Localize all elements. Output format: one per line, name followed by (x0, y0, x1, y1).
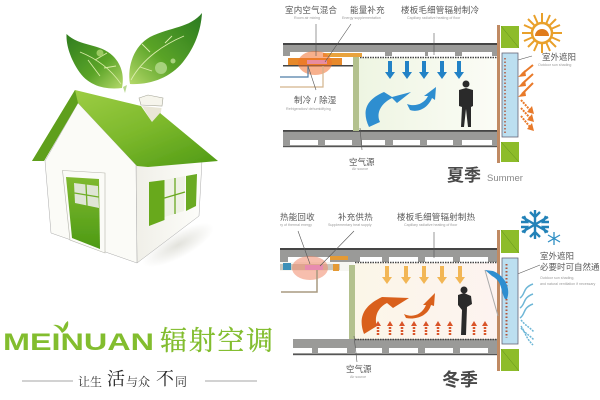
winter room (355, 263, 497, 339)
winter labels: 室外遮阳 (540, 251, 574, 261)
stem (123, 85, 127, 93)
panel: winter diagram (280, 210, 600, 390)
winter labels: Capillary radiative heating of floor (404, 223, 458, 227)
winter floor slab (293, 339, 497, 355)
winter ceiling slab (280, 248, 497, 262)
logo: Chinese name: 辐射空调 (160, 326, 275, 356)
winter labels: 热能回收 (280, 212, 315, 222)
winter labels: 楼板毛细管辐射制热 (397, 212, 476, 222)
icon: person silhouette (459, 80, 473, 127)
icon: sun (522, 13, 562, 53)
summer labels: 室内空气混合 (285, 5, 338, 15)
summer labels: Capillary radiative heating of floor (407, 16, 461, 20)
summer labels (285, 5, 576, 185)
icon: blue airflow arrows (366, 87, 436, 127)
summer left wall and plant (280, 51, 362, 131)
winter labels: 冬季 (442, 370, 478, 390)
slogan: 与众 (126, 375, 150, 389)
icon: right leaf (129, 13, 202, 84)
icon: cool air waves (520, 284, 534, 345)
summer labels: 夏季 (447, 166, 481, 185)
illustration: green house with leaves (32, 13, 219, 275)
slogan: 让生 (78, 374, 102, 389)
summer labels: Energy supplementation (342, 16, 381, 20)
winter labels: Outdoor sun shading, (540, 276, 574, 280)
summer floor slab (283, 130, 497, 147)
icon: large snowflake (521, 210, 549, 239)
summer labels: 楼板毛细管辐射制冷 (401, 5, 480, 15)
winter leader lines (298, 231, 540, 362)
summer labels: 制冷 / 除湿 (294, 95, 337, 105)
winter left wall and plant (280, 256, 355, 339)
icon: orange airflow arrows (362, 293, 435, 334)
icon: small snowflake (548, 232, 560, 245)
summer facade (497, 25, 519, 163)
icon: rising heat arrows (375, 321, 488, 335)
winter labels: and natural ventilation if necessary (540, 282, 596, 286)
icon: person silhouette (458, 286, 472, 335)
door (62, 170, 105, 253)
house side wall (136, 160, 202, 263)
slogan: 不 (156, 369, 174, 389)
icon: logo sprout (53, 321, 68, 333)
winter labels (280, 212, 600, 390)
summer labels: 空气源 (349, 157, 375, 167)
summer labels: Refrigeration/ dehumidifying (286, 107, 331, 111)
winter labels: Air source (350, 375, 366, 379)
summer labels: Air source (352, 167, 368, 171)
winter labels: 空气源 (346, 364, 372, 374)
winter labels: 必要时可自然通 (540, 262, 600, 272)
icon: incoming sun arrows (518, 65, 534, 131)
winter labels: 补充供热 (338, 212, 373, 222)
summer labels: Room air mixing (294, 16, 320, 20)
house front wall (45, 103, 137, 263)
summer ceiling slab (283, 43, 497, 58)
logo: Meinuan wordmark (3, 321, 154, 356)
winter labels: Supplementary heat supply (328, 223, 372, 227)
summer room (358, 58, 497, 131)
summer labels: Outdoor sun shading (538, 63, 571, 67)
slogan: 活 (107, 369, 125, 389)
winter facade (485, 230, 519, 371)
roof (32, 90, 218, 167)
ground shadow (137, 215, 219, 275)
icon: left leaf (66, 34, 123, 88)
slogan: 同 (175, 375, 187, 389)
icon: blue ventilation arrow (485, 270, 508, 299)
summer labels: 室外遮阳 (542, 52, 576, 62)
slogan (22, 369, 257, 389)
logo: Meinuan wordmark: MEINUAN (3, 329, 154, 356)
icon: yellow heat arrows (382, 266, 465, 284)
panel: summer diagram (280, 5, 576, 185)
summer labels: Summer (487, 173, 523, 184)
winter labels: ry of thermal energy (280, 223, 312, 227)
window (149, 174, 197, 226)
icon: blue cooling arrows (385, 61, 464, 79)
summer labels: 能量补充 (350, 5, 385, 15)
summer leader lines (308, 24, 532, 150)
chimney (139, 95, 163, 122)
